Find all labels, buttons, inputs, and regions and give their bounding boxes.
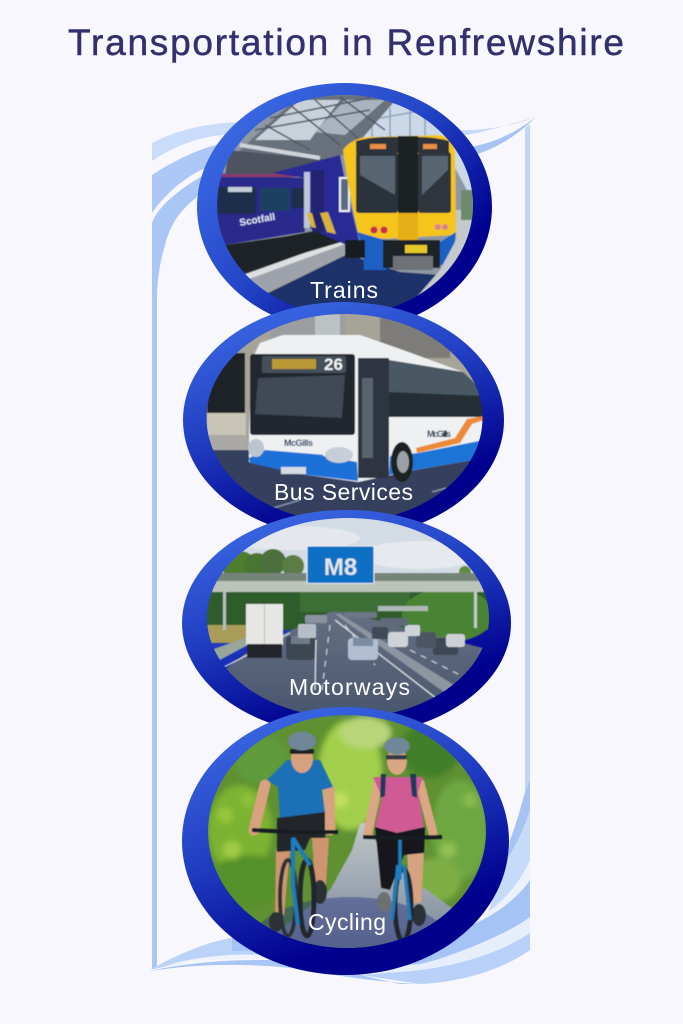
- ring: [183, 302, 504, 538]
- top right ribbons: [455, 117, 536, 136]
- woman: [363, 738, 442, 941]
- man: [252, 732, 338, 936]
- operator lettering: McGills: [284, 438, 313, 448]
- photo: bus: [205, 312, 485, 525]
- bridge: [212, 573, 484, 581]
- circle: bus services: [183, 302, 504, 538]
- trees: [223, 550, 252, 574]
- right frame line: [525, 124, 530, 800]
- foliage: [205, 713, 490, 953]
- circle: motorways: [182, 510, 511, 736]
- decorative ribbon frame: [150, 117, 536, 984]
- label: cycling: Cycling: [308, 909, 386, 935]
- bottom left ribbons: [150, 938, 270, 970]
- left train carriage: [215, 173, 305, 252]
- label shade: [261, 896, 436, 948]
- truck: [246, 604, 283, 645]
- bottom right ribbons: [508, 780, 530, 858]
- platform and track: [227, 231, 316, 274]
- label: trains: Trains: [310, 277, 378, 303]
- path: [276, 822, 452, 948]
- side windows: [388, 360, 480, 397]
- photo: bus: McGills: [427, 429, 451, 439]
- motorway sign: [307, 546, 374, 584]
- train side: [272, 155, 362, 252]
- motorway sign: M8: [324, 554, 357, 581]
- photo: motorway: [205, 516, 494, 725]
- right platform: [416, 210, 473, 296]
- lower blue skirt and coupler: [357, 232, 387, 270]
- ring: [182, 510, 511, 736]
- route number: 26: [324, 355, 343, 374]
- road: [226, 611, 482, 713]
- top left ribbons: [152, 122, 248, 161]
- train front: [343, 135, 456, 240]
- title: Transportation in Renfrewshire: [68, 22, 624, 63]
- side lower blue and orange stripe: [389, 440, 484, 475]
- ring: [182, 707, 509, 975]
- circle: trains: [197, 83, 492, 331]
- label: motorways: Motorways: [289, 674, 410, 700]
- left frame line: [152, 173, 208, 969]
- door: [358, 358, 389, 478]
- road: [213, 450, 470, 516]
- ring: [197, 83, 492, 331]
- wheel: [391, 442, 413, 482]
- photo: cyclists: [208, 715, 486, 948]
- bus body: [249, 335, 484, 482]
- label: bus services: Bus Services: [274, 479, 413, 505]
- circle: cycling: [182, 707, 509, 993]
- operator lettering: Scotfall: [239, 212, 276, 229]
- photo: train at station: [215, 93, 476, 320]
- cars: [286, 636, 315, 660]
